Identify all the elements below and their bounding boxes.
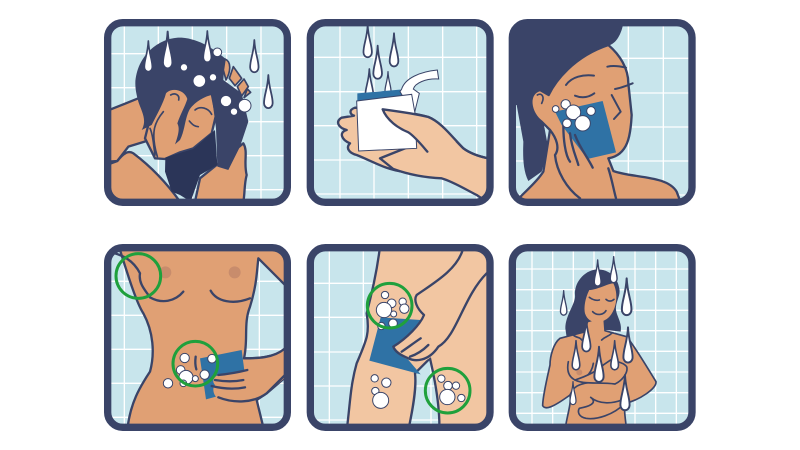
panel: wet hair under the shower bbox=[104, 19, 291, 206]
hand lines bbox=[393, 250, 487, 360]
foam bubbles bbox=[552, 100, 595, 131]
chest lines bbox=[568, 333, 612, 395]
fingers in hair bbox=[223, 59, 251, 98]
eye and brow bbox=[189, 108, 212, 127]
ear line bbox=[171, 94, 179, 100]
breast lines bbox=[150, 291, 250, 302]
hand and arm edge bbox=[393, 247, 492, 362]
upper hand bbox=[575, 360, 627, 384]
foam bubbles bbox=[180, 48, 251, 115]
cheek wipe bbox=[555, 101, 616, 159]
frame bbox=[512, 23, 692, 202]
nipples bbox=[159, 266, 241, 278]
hair bbox=[135, 38, 248, 170]
nipple bbox=[576, 369, 582, 375]
frame bbox=[310, 23, 490, 202]
foam bubbles bbox=[371, 291, 465, 408]
fingers behind packet bbox=[336, 106, 402, 173]
torso bbox=[120, 247, 290, 430]
thumb outline bbox=[383, 109, 492, 159]
shoulder and arm bbox=[111, 98, 146, 162]
panel: wiping the legs bbox=[300, 240, 500, 440]
water drops bbox=[560, 257, 633, 410]
lower hand bbox=[578, 397, 625, 419]
highlight ring: groin bbox=[173, 341, 218, 386]
face and neck bbox=[145, 87, 216, 159]
hand bbox=[213, 350, 284, 397]
facial features bbox=[589, 297, 614, 314]
hand fingers bbox=[550, 125, 616, 198]
raised arm bbox=[195, 143, 247, 202]
highlight ring: back of knee bbox=[367, 283, 412, 328]
packet bbox=[357, 94, 417, 151]
panel: wiping armpit and groin bbox=[104, 244, 291, 431]
highlight ring: inner thigh bbox=[425, 368, 470, 413]
hair strand bbox=[150, 112, 163, 157]
highlight ring: armpit bbox=[116, 254, 161, 298]
water drops bbox=[144, 31, 273, 108]
chest bbox=[107, 152, 180, 202]
frame bbox=[108, 248, 287, 427]
face and neck bbox=[513, 45, 682, 205]
navel bbox=[195, 357, 196, 369]
torn strip bbox=[400, 70, 439, 115]
fingers bbox=[212, 348, 285, 401]
hand and wrist bbox=[378, 112, 486, 198]
thumb bbox=[384, 110, 456, 142]
frame bbox=[310, 248, 490, 427]
wipe inside packet bbox=[357, 90, 402, 100]
foam bubbles bbox=[163, 353, 216, 388]
face bbox=[585, 283, 616, 322]
arm line bbox=[115, 253, 150, 297]
hand bbox=[393, 315, 450, 362]
panel: wiping the face bbox=[508, 19, 696, 206]
hair bbox=[565, 269, 621, 337]
frame bbox=[512, 248, 692, 427]
panel: opening the wipe packet bbox=[306, 19, 494, 206]
leg bbox=[347, 247, 492, 430]
frame bbox=[108, 23, 287, 202]
panel: rinsing off bbox=[500, 240, 700, 440]
wipe bbox=[200, 350, 247, 399]
water drops bbox=[363, 25, 398, 100]
torso and arms bbox=[543, 317, 656, 430]
eyes and brows bbox=[566, 66, 633, 119]
wet lower hair bbox=[165, 130, 217, 202]
wipe bbox=[369, 317, 421, 374]
ear line bbox=[537, 94, 543, 103]
hair bbox=[516, 26, 623, 181]
